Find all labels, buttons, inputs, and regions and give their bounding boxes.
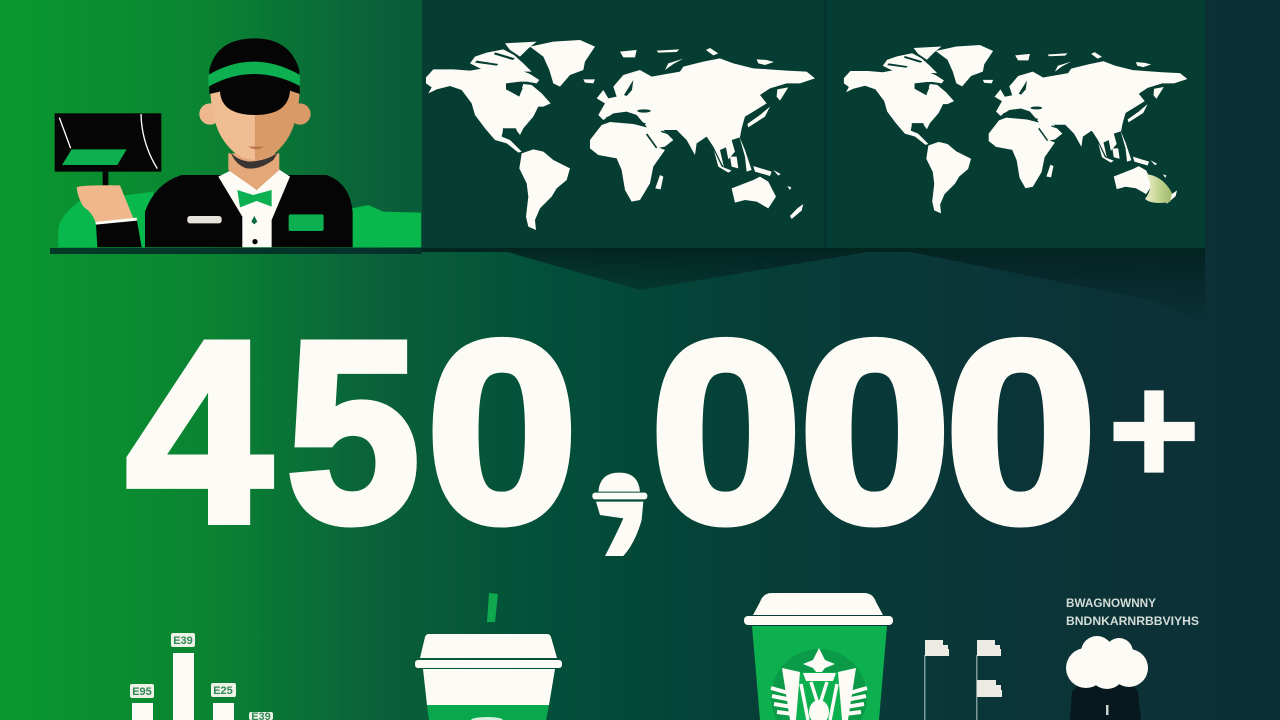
hair bbox=[209, 38, 300, 115]
torso bbox=[145, 175, 353, 247]
hand and cuff bbox=[77, 185, 142, 247]
flag 1 bbox=[924, 640, 949, 720]
panel shadow bbox=[500, 250, 1205, 325]
shirt bbox=[218, 169, 290, 247]
big number: 4 bbox=[127, 287, 273, 576]
big number: 0 bbox=[426, 288, 578, 576]
big number: 0 bbox=[799, 288, 951, 576]
big number bbox=[127, 287, 1200, 576]
cup logo bbox=[771, 648, 867, 720]
world map right bbox=[844, 45, 1187, 213]
buttons bbox=[251, 216, 257, 224]
comma shaped as cup bbox=[592, 473, 647, 556]
bar 2: E39 bbox=[173, 635, 193, 647]
bar 3 bbox=[211, 683, 236, 720]
headband bbox=[208, 62, 300, 87]
illustration: barista bbox=[55, 38, 421, 247]
sign held by barista bbox=[55, 113, 161, 187]
world map left bbox=[426, 40, 815, 230]
big number: 5 bbox=[286, 287, 420, 576]
name badge bbox=[187, 216, 222, 223]
icon: green branded cup bbox=[744, 593, 893, 720]
caption text: BWAGNOWNNY bbox=[1066, 598, 1156, 610]
ears bbox=[199, 103, 221, 125]
bar 2 bbox=[171, 633, 195, 720]
highlighted region: eastern Australia bbox=[1145, 174, 1172, 203]
bow tie bbox=[237, 190, 272, 207]
big number: 0 bbox=[945, 288, 1097, 576]
bar 1: E95 bbox=[132, 686, 152, 698]
icon: takeaway cup with straw bbox=[415, 593, 562, 720]
bar 3: E25 bbox=[213, 685, 233, 697]
pocket square bbox=[289, 214, 324, 231]
caption text: BNDNKARNRBBVIYHS bbox=[1066, 616, 1199, 628]
bar 1 bbox=[130, 684, 154, 720]
panel: world maps bbox=[420, 0, 1205, 252]
bar chart bbox=[130, 633, 273, 720]
caption text bbox=[1066, 598, 1199, 628]
icon: flags bbox=[924, 640, 1002, 720]
neck bbox=[228, 153, 279, 190]
big number: + bbox=[1108, 342, 1200, 518]
flag 3 bbox=[977, 680, 1002, 697]
bushes bbox=[58, 192, 153, 247]
baseline shelf under barista bbox=[50, 248, 422, 254]
face bbox=[210, 87, 255, 160]
flag 2 bbox=[976, 640, 1001, 720]
big number: 0 bbox=[650, 288, 802, 576]
icon: cloud on dark pillar bbox=[1066, 636, 1148, 720]
